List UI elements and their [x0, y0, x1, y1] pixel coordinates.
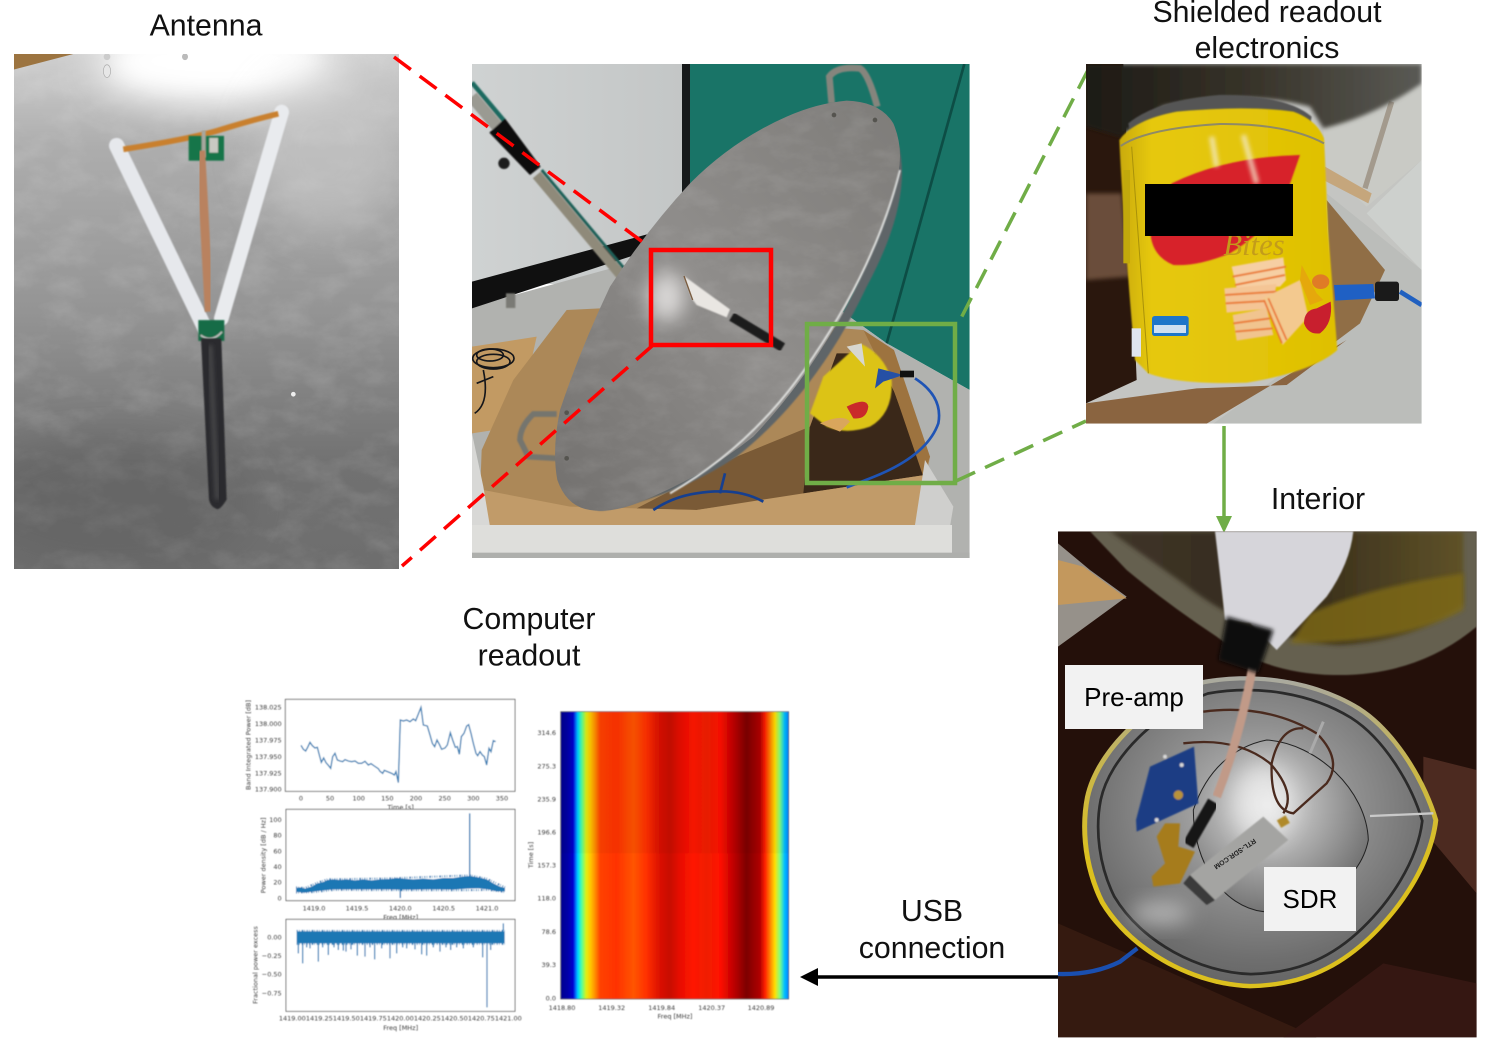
floor [472, 264, 970, 553]
blue usb [1058, 948, 1137, 974]
arrow: green can to interior [1216, 426, 1232, 533]
chart: fractional power excess: 1419.00 [279, 1015, 306, 1023]
gold connector [1152, 823, 1195, 887]
chart: power density spectrum: 1421.0 [476, 904, 498, 912]
upper wok [1060, 531, 1477, 675]
pre-amp board [1136, 747, 1198, 832]
chart: waterfall heatmap [527, 712, 789, 1020]
chart: waterfall heatmap: 235.9 [537, 796, 556, 804]
chart: power density spectrum: Power density [dB / Hz] [259, 817, 267, 893]
floor [1213, 193, 1422, 424]
feed [684, 276, 730, 317]
chart: band integrated power: 200 [410, 794, 422, 802]
box front wall [483, 475, 925, 528]
title: Interior: Interior [1271, 483, 1365, 516]
red swoosh [1151, 155, 1300, 265]
chart: band integrated power: 300 [467, 794, 480, 802]
title: USB connection [859, 895, 1005, 965]
chart: band integrated power: Time [s] [386, 804, 414, 812]
chart: power density spectrum: 60 [273, 847, 282, 855]
cardboard [1086, 64, 1137, 403]
chart: fractional power excess: 1419.75 [360, 1015, 387, 1023]
chart: waterfall heatmap: 196.6 [537, 829, 556, 837]
chart: fractional power excess: 1420.25 [414, 1015, 441, 1023]
wok outer rim shadow [597, 143, 902, 511]
callout: green selection box [807, 324, 955, 483]
brand badge [1304, 302, 1331, 334]
chart: band integrated power: 250 [438, 794, 451, 802]
title: Shielded readout electronics [1152, 0, 1382, 65]
chart: power density spectrum: 1419.5 [346, 904, 368, 912]
chart: waterfall heatmap: 78.6 [542, 928, 556, 936]
photo: interior of shield [1058, 531, 1477, 1037]
box dark interior [803, 353, 925, 493]
pink coax and black connector [1217, 667, 1253, 797]
sdr box [1183, 815, 1290, 905]
white arm [1215, 531, 1353, 650]
coax [201, 151, 209, 312]
box interior under wok [637, 427, 810, 510]
chart: fractional power excess: Fractional power excess [251, 926, 259, 1004]
wok face [555, 101, 900, 511]
copper dipole [123, 114, 278, 149]
photo: antenna closeup [0, 30, 400, 570]
wall right [1323, 83, 1422, 207]
chart: fractional power excess: 1419.25 [306, 1015, 333, 1023]
chart: power density spectrum: 1420.0 [389, 904, 412, 912]
chart: waterfall heatmap: 1418.80 [549, 1004, 575, 1012]
redaction block [1145, 184, 1293, 236]
wok top [1086, 64, 1422, 137]
chart: band integrated power: 150 [381, 794, 394, 802]
blue cable under dish [653, 473, 763, 510]
thin cable loop [1183, 710, 1333, 813]
corner background [1058, 543, 1127, 647]
label: SDR [1264, 867, 1356, 931]
top board [189, 131, 224, 161]
chart: band integrated power: 50 [326, 794, 334, 802]
chart: power density spectrum: 1419.0 [303, 904, 325, 912]
chart: band integrated power: 137.975 [255, 736, 282, 744]
table and cables [472, 337, 537, 433]
cardboard box [480, 308, 930, 527]
usb cable [1334, 284, 1375, 301]
wall [472, 64, 685, 284]
chart: power density spectrum: 20 [273, 879, 282, 887]
title: Computer readout [462, 603, 596, 672]
chart: power density spectrum: Freq [MHz] [383, 914, 418, 922]
chart: waterfall heatmap: 0.0 [546, 994, 556, 1002]
chart: band integrated power [245, 699, 515, 812]
chart: band integrated power: 138.025 [255, 704, 282, 712]
chart: band integrated power: 350 [496, 794, 508, 802]
label: SDR: SDR [1283, 884, 1337, 914]
yellow can [810, 343, 892, 431]
chart: waterfall heatmap: 275.3 [537, 762, 556, 770]
chart group: time and spectrum plots [245, 699, 522, 1032]
bowl inner ring [1098, 690, 1422, 974]
title: Computer readout: readout [478, 640, 581, 672]
white arms [117, 112, 282, 332]
black rod end [1218, 617, 1273, 673]
wok texture [556, 121, 890, 502]
chart: band integrated power: 137.950 [255, 753, 282, 761]
blue cable and connector [847, 378, 939, 487]
handle top [829, 68, 877, 107]
chart: fractional power excess: Freq [MHz] [383, 1024, 418, 1032]
brand word: Bites [1223, 228, 1285, 262]
label: Pre-amp [1065, 665, 1203, 729]
photo: wok dish in box [472, 64, 970, 558]
chart: fractional power excess: 1420.75 [468, 1015, 495, 1023]
chart: fractional power excess: −0.25 [262, 952, 282, 960]
chart: fractional power excess: −0.50 [262, 971, 282, 979]
box right wall [863, 330, 930, 477]
title: Antenna: Antenna [150, 10, 263, 42]
chart: fractional power excess: −0.75 [262, 990, 282, 998]
title: Computer readout: Computer [462, 603, 596, 636]
chart: waterfall heatmap: 157.3 [537, 862, 556, 870]
chart: band integrated power: 137.925 [255, 769, 282, 777]
vitamin badge [1152, 316, 1189, 336]
chart: power density spectrum: 1420.5 [432, 904, 455, 912]
chart: fractional power excess: 1419.50 [333, 1015, 360, 1023]
barcode [1132, 328, 1141, 357]
side label [1132, 147, 1148, 373]
plastic tub [472, 433, 490, 527]
tin can [1119, 108, 1337, 383]
chart: waterfall heatmap: 39.3 [542, 961, 556, 969]
carbon rod [201, 339, 227, 509]
chart: fractional power excess: 1420.50 [441, 1015, 468, 1023]
chart: band integrated power: 137.900 [255, 786, 282, 794]
chart: power density spectrum [259, 809, 515, 922]
photo: shielded can [1086, 64, 1422, 424]
callout: red zoom lines [394, 57, 652, 566]
chart: band integrated power: 138.000 [255, 720, 282, 728]
wok highlight [648, 272, 685, 322]
chart: waterfall heatmap: 1419.84 [648, 1004, 675, 1012]
tripod pole [472, 83, 624, 308]
bottom board [198, 320, 224, 341]
chart: power density spectrum: 40 [273, 863, 282, 871]
chart: waterfall heatmap: 1420.89 [748, 1004, 774, 1012]
chart: power density spectrum: 80 [273, 832, 282, 840]
chart: waterfall heatmap: Freq [MHz] [658, 1012, 692, 1020]
callout: red selection box [651, 250, 771, 345]
chart: power density spectrum: 100 [269, 816, 282, 824]
cheese [1300, 265, 1323, 305]
arrow: USB connection [800, 968, 1058, 986]
teal locker [687, 64, 970, 390]
chart: fractional power excess: 0.00 [267, 933, 282, 941]
title: USB connection: USB [901, 895, 963, 928]
inner bowl [1193, 740, 1368, 912]
callout: green zoom lines [956, 70, 1088, 481]
chart: band integrated power: 0 [299, 794, 303, 802]
sdr lettering: RTL-SDR.COM [1212, 837, 1257, 870]
tin rim grey [1128, 95, 1312, 132]
chart: fractional power excess [251, 919, 522, 1032]
tin bowl rim [1082, 676, 1438, 988]
chart: power density spectrum: 0 [278, 894, 282, 902]
chart: waterfall heatmap: 1420.37 [698, 1004, 725, 1012]
chart: band integrated power: 100 [352, 794, 365, 802]
chart: waterfall heatmap: Time [s] [527, 842, 535, 869]
chart: fractional power excess: 1421.00 [495, 1015, 522, 1023]
wafers [1224, 257, 1308, 345]
handle rivets [564, 113, 877, 461]
chart: waterfall heatmap: 1419.32 [598, 1004, 625, 1012]
chart: waterfall heatmap: 118.0 [537, 895, 556, 903]
handle bottom [520, 414, 557, 458]
chart: waterfall heatmap: 314.6 [537, 729, 556, 737]
title: USB connection: connection [859, 932, 1005, 965]
chart: band integrated power: Band Integrated Power [dB] [245, 700, 253, 790]
title: Shielded readout electronics: electronics [1195, 32, 1339, 65]
label: Pre-amp: Pre-amp [1084, 682, 1184, 712]
chart: fractional power excess: 1420.00 [387, 1015, 414, 1023]
